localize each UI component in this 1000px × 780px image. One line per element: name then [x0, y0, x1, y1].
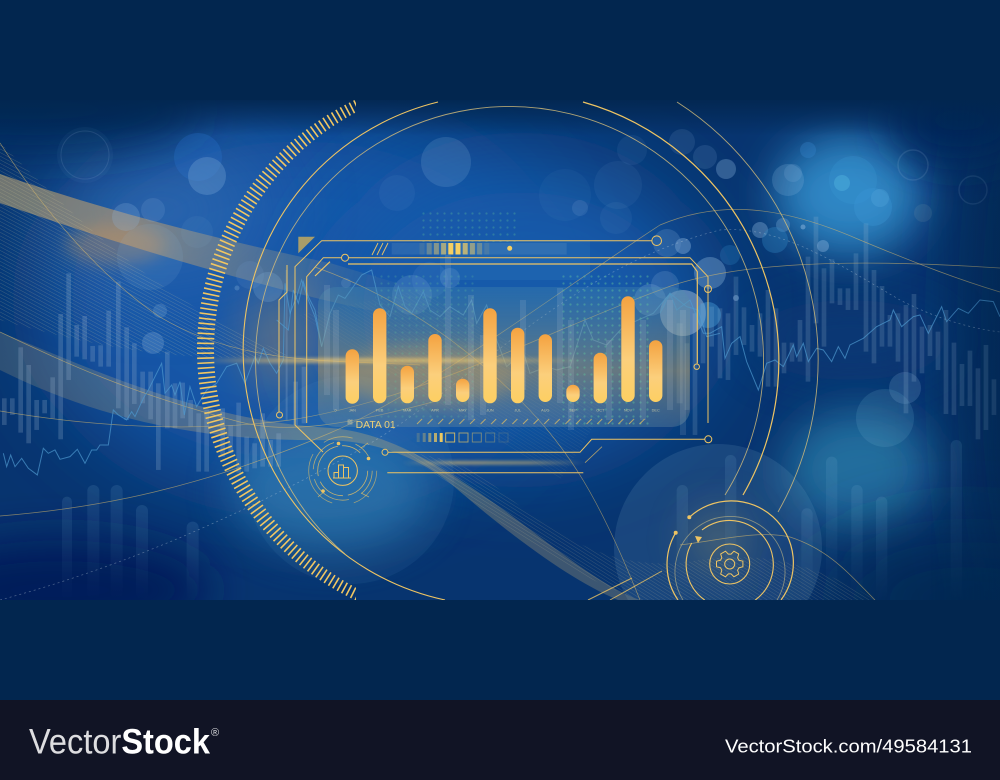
- inner frame line: [307, 258, 708, 423]
- left bracket line: [279, 265, 287, 412]
- thin line mesh waves: [0, 143, 875, 600]
- second inner frame line: [315, 262, 697, 364]
- lower faded rounded bars: [62, 440, 962, 600]
- central translucent chart panel: [318, 212, 690, 427]
- bokeh circles: [57, 127, 987, 447]
- data label: DATA 01: [356, 420, 396, 431]
- large translucent circles: [246, 376, 822, 652]
- gear glow: [690, 510, 746, 570]
- month labels: [334, 409, 660, 412]
- footer logo: ®: [211, 727, 219, 739]
- month labels: OCT: [596, 408, 605, 412]
- icon: chart badge: [309, 437, 377, 505]
- data label: [348, 420, 396, 428]
- outer frame line: [295, 241, 652, 452]
- corner triangle: [298, 237, 315, 253]
- left candlestick bars: [2, 270, 306, 473]
- background image panel: [0, 100, 1000, 600]
- large gold orbit arcs: [243, 102, 818, 600]
- gold wave bands: [0, 174, 640, 600]
- panel background faint bars: [324, 255, 686, 435]
- month labels: 0: [334, 408, 337, 412]
- thin gold curves: [0, 143, 1000, 600]
- lower glow lines: [387, 447, 602, 473]
- footer image id: VectorStock.com/49584131: [725, 737, 972, 757]
- month labels: DEC: [652, 408, 660, 412]
- top progress strip: [372, 243, 567, 255]
- slash tick row: [416, 418, 645, 424]
- right candlestick bars: [677, 217, 996, 439]
- month labels: AUG: [541, 408, 549, 412]
- footer bar: [0, 700, 1000, 780]
- month labels: MAY: [459, 408, 467, 412]
- side vignette: [942, 176, 1000, 439]
- month labels: MAR: [403, 408, 412, 412]
- status cells: [417, 433, 508, 442]
- horizontal gold glow: [190, 358, 590, 363]
- circular tick ring: [197, 100, 356, 600]
- month labels: NOV: [624, 408, 633, 412]
- blue line chart trace left: [3, 270, 1000, 475]
- month labels: JUL: [514, 408, 521, 412]
- month labels: FEB: [376, 408, 384, 412]
- icon: gear badge: [667, 501, 793, 600]
- bars: [346, 296, 662, 404]
- blue gradient glow background: [0, 102, 1000, 600]
- month labels: JAN: [349, 408, 356, 412]
- HUD frame: [276, 236, 712, 455]
- footer logo: VectorStock: [29, 722, 210, 761]
- month labels: JUN: [486, 408, 494, 412]
- month labels: APR: [431, 408, 439, 412]
- lower connector line: [388, 439, 705, 452]
- frame terminals: [342, 236, 712, 455]
- bar chart: [334, 296, 662, 412]
- month labels: SEP: [569, 408, 577, 412]
